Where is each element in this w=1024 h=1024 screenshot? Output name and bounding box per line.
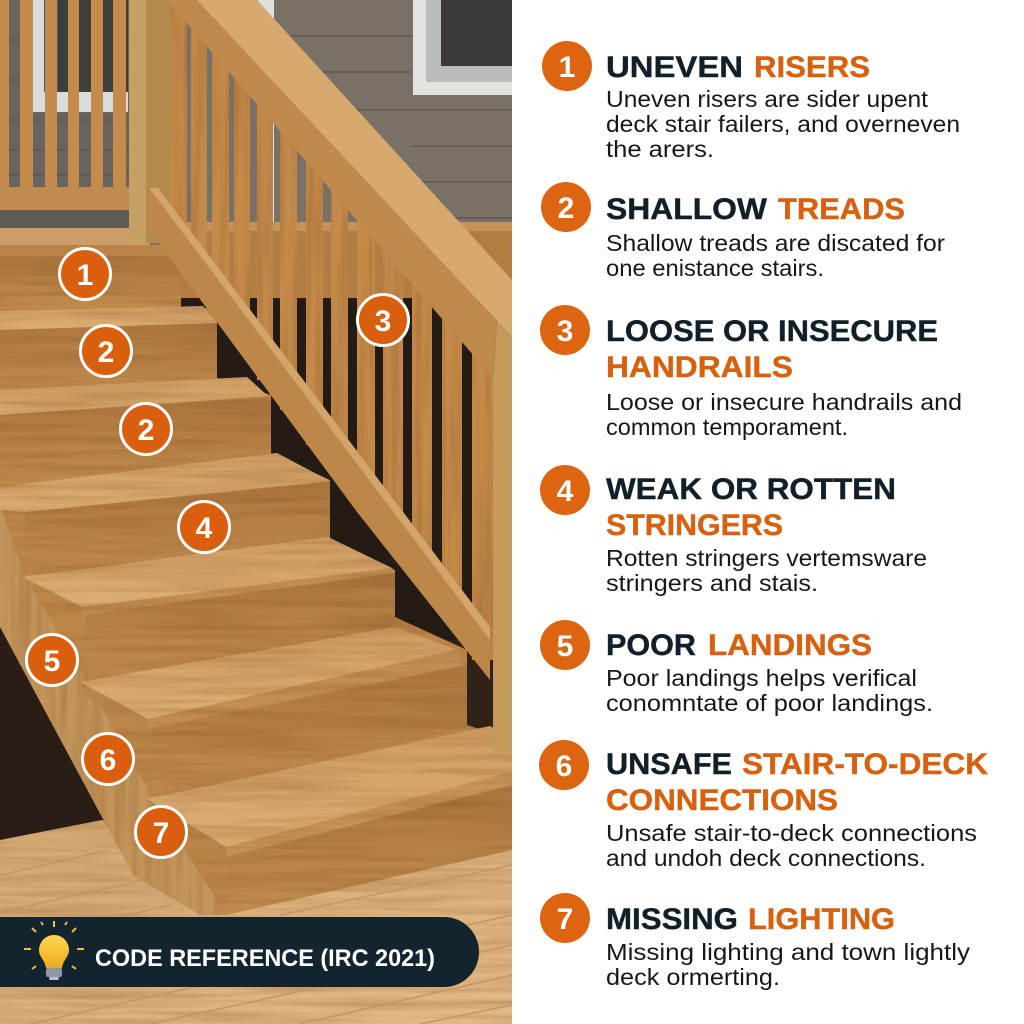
marker 5: 5 [44,645,60,678]
dark underside of deck [172,297,512,690]
badge 3 [540,305,590,355]
balusters [170,0,493,660]
heading 4 [606,473,896,542]
item 4 [540,465,927,596]
marker 2: 2 [98,336,114,369]
heading 7 [606,903,895,936]
deck landing [0,228,168,256]
body 6: and undoh deck connections. [606,845,926,871]
marker 4 [178,502,230,552]
mulch [0,620,500,860]
stair backing [0,256,512,915]
body 6: Unsafe stair-to-deck connections [606,820,977,846]
body 5: Poor landings helps verifical [606,665,917,691]
numbered markers on photo [26,248,408,858]
body 4: stringers and stais. [606,570,818,596]
step 6 [80,627,467,800]
marker 1: 1 [77,259,93,292]
body 4: Rotten stringers vertemsware [606,545,927,571]
heading 2: SHALLOW [606,193,768,226]
banner text: CODE REFERENCE (IRC 2021) [95,945,435,972]
heading 3 [606,315,938,384]
heading 6: CONNECTIONS [606,784,838,817]
body 5 [606,665,933,716]
marker 7 [136,806,186,858]
heading 3: HANDRAILS [606,351,793,384]
marker 5 [26,634,78,686]
badge 7 [540,893,590,943]
left railing [0,0,130,228]
upper window [413,0,512,95]
badge 4 [540,465,590,515]
ground decking [0,820,512,1024]
item 6 [539,740,988,871]
item 5 [540,620,933,716]
left window [32,0,274,222]
badge 5 [540,620,590,670]
item 1 [542,41,960,162]
heading 5: POOR [606,629,696,662]
code reference banner [0,917,479,987]
body 7: Missing lighting and town lightly [606,939,971,965]
house siding [0,0,512,300]
body 6 [606,820,977,871]
body 3: Loose or insecure handrails and [606,389,962,415]
badge 2 [541,182,591,232]
badge 2: 2 [558,192,574,225]
badge 1 [542,41,592,91]
body 2: Shallow treads are discated for [606,230,945,256]
heading 5 [606,629,872,662]
handrail [167,0,512,378]
item 2 [541,182,945,281]
panel: failure list [539,41,988,990]
body 7: deck ormerting. [606,964,780,990]
heading 1: UNEVEN [606,51,743,84]
heading 6: UNSAFE [606,748,732,781]
item 7 [540,893,971,990]
item 3 [540,305,962,440]
badge 6 [539,740,589,790]
heading 2: TREADS [778,193,905,226]
step 3 [0,377,271,489]
deck fascia [172,222,512,298]
newel post [129,0,172,243]
heading 4: STRINGERS [606,509,783,542]
marker 2 [80,326,132,376]
step 1 riser [0,256,181,308]
badge 3: 3 [557,315,573,348]
right post [493,321,512,752]
body 1 [606,86,960,162]
body 1: the arers. [606,136,714,162]
body 7 [606,939,971,990]
marker 4: 4 [196,512,213,545]
stringer [0,505,226,915]
marker 6: 6 [100,744,116,777]
step 2 [0,306,217,392]
marker 3: 3 [375,305,391,338]
marker 1 [60,248,110,300]
marker 2 second [120,404,172,454]
step 5 [22,537,395,682]
heading 3: LOOSE OR INSECURE [606,315,938,348]
badge 5: 5 [557,630,573,663]
step 4 [0,453,330,577]
heading 2 [606,193,905,226]
body 2: one enistance stairs. [606,255,824,281]
body 1: deck stair failers, and overneven [606,111,960,137]
heading 4: WEAK OR ROTTEN [606,473,896,506]
heading 7: MISSING [606,903,738,936]
body 5: conomntate of poor landings. [606,690,933,716]
heading 6 [606,748,988,817]
body 3: common temporament. [606,414,848,440]
heading 6: STAIR-TO-DECK [742,748,988,781]
body 3 [606,389,962,440]
body 1: Uneven risers are sider upent [606,86,929,112]
marker 6 [82,734,134,784]
panel: stair photo [0,0,512,1024]
badge 4: 4 [557,475,574,508]
icon: light bulb [24,921,84,980]
heading 1 [606,51,870,84]
heading 1: RISERS [754,51,870,84]
heading 7: LIGHTING [748,903,895,936]
stair steps [0,256,512,915]
diagonal lower rail [149,188,490,680]
step 7 [147,726,512,915]
marker 7: 7 [153,817,169,850]
body 2 [606,230,945,281]
marker 2 second: 2 [138,414,154,447]
badge 7: 7 [557,903,573,936]
body 4 [606,545,927,596]
marker 3 [358,294,408,346]
heading 5: LANDINGS [708,629,872,662]
badge 1: 1 [559,51,575,84]
badge 6: 6 [556,750,572,783]
